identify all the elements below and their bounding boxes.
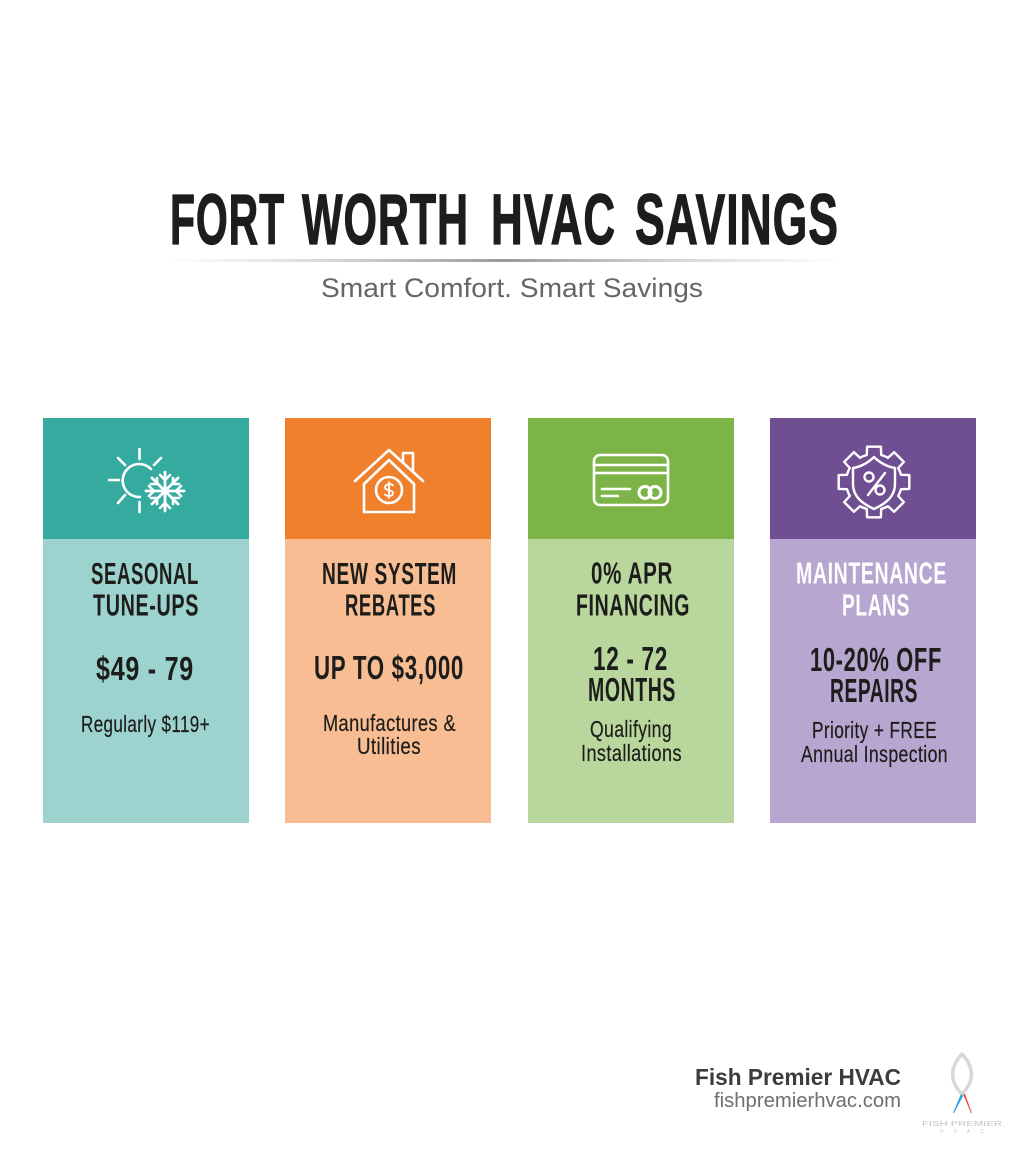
- note: Manufactures &: [323, 710, 456, 736]
- note: Utilities: [357, 733, 421, 759]
- heading: NEW SYSTEM: [322, 556, 457, 591]
- title: WORTH: [302, 181, 469, 260]
- panel: new system rebates: [285, 418, 491, 823]
- heading: [322, 556, 457, 622]
- brand url: fishpremierhvac.com: [714, 1090, 901, 1112]
- price: 10-20% OFF: [810, 641, 942, 678]
- title: SAVINGS: [635, 181, 839, 260]
- note: Regularly $119+: [81, 711, 210, 737]
- brand name: Fish Premier HVAC: [695, 1064, 901, 1090]
- note: Qualifying: [590, 716, 672, 742]
- heading: 0% APR: [591, 556, 673, 590]
- icon: house with dollar: [355, 450, 423, 512]
- price: MONTHS: [588, 671, 676, 708]
- heading: TUNE-UPS: [93, 588, 199, 622]
- subtitle: Smart Comfort. Smart Savings: [321, 273, 703, 303]
- price: [588, 640, 676, 708]
- heading: PLANS: [842, 588, 910, 622]
- heading: REBATES: [345, 588, 436, 622]
- icon: gear with percent shield: [839, 447, 909, 517]
- panel: 0% APR financing: [528, 418, 734, 823]
- note: Installations: [581, 740, 682, 766]
- heading: SEASONAL: [91, 556, 199, 591]
- price: $49 - 79: [96, 650, 194, 687]
- note: Annual Inspection: [801, 741, 948, 767]
- icon: sun and snowflake: [109, 449, 184, 512]
- heading: [576, 556, 690, 622]
- note: [323, 710, 456, 759]
- heading: [796, 556, 947, 622]
- price: UP TO $3,000: [314, 649, 464, 686]
- logo: HVAC: [940, 1129, 984, 1135]
- price: REPAIRS: [830, 672, 918, 709]
- title: FORT: [170, 181, 285, 260]
- title: HVAC: [491, 181, 616, 260]
- heading: [91, 556, 199, 622]
- price: 12 - 72: [593, 640, 668, 677]
- title: [170, 181, 839, 260]
- icon: credit card: [594, 455, 668, 505]
- panel: seasonal tune-ups: [43, 418, 249, 823]
- logo: [922, 1054, 1003, 1135]
- price: [810, 641, 942, 709]
- heading: FINANCING: [576, 588, 690, 622]
- note: [581, 716, 682, 766]
- title underline: [165, 259, 843, 262]
- note: [801, 717, 948, 767]
- logo: FISH PREMIER: [922, 1119, 1003, 1128]
- panel: maintenance plans: [770, 418, 976, 823]
- note: Priority + FREE: [812, 717, 937, 743]
